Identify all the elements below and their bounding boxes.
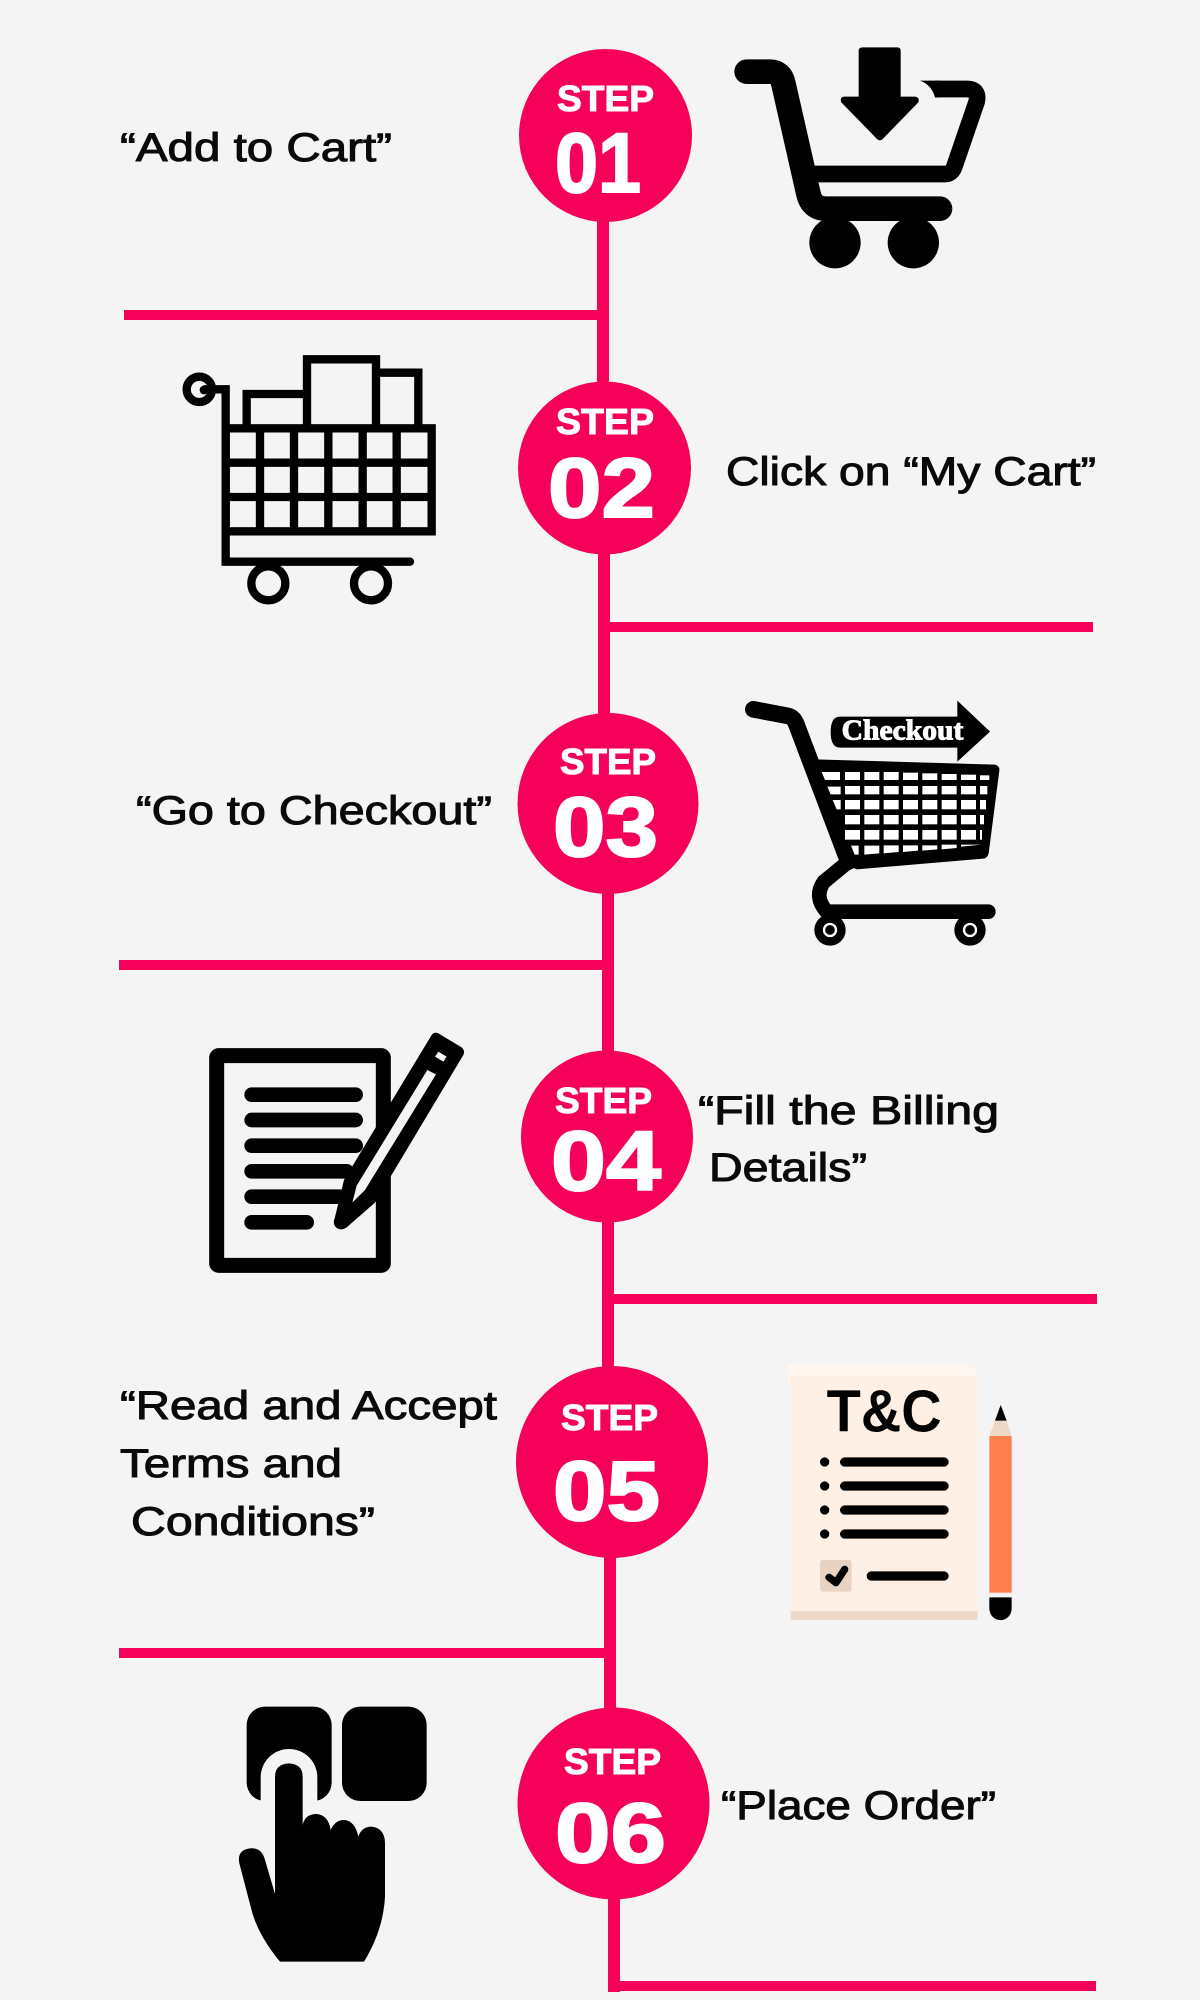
badge: step 03: 03 [553,780,658,874]
icon: checkout cart [753,701,999,946]
label: read and accept terms and conditions: Terms and [120,1442,342,1486]
label: fill the billing details: Details” [709,1146,867,1190]
badge: step 06: STEP [564,1741,661,1782]
icon: document with pencil [217,1033,464,1265]
label: go to checkout: “Go to Checkout” [136,789,492,833]
badge: step 02 [518,382,691,554]
icon: finger pressing button [239,1707,427,1962]
icon: checkout cart: Checkout [842,716,964,747]
badge: step 05: 05 [553,1444,660,1538]
label: add to cart: “Add to Cart” [120,126,392,170]
badge: step 01: STEP [557,78,654,119]
step 5 [120,1365,1012,1620]
step 3 [136,701,999,946]
badge: step 05 [516,1366,708,1558]
badge: step 04: 04 [551,1114,661,1208]
step 2 [187,359,1096,600]
icon: terms and conditions sheet with pencil: T&C [827,1378,942,1445]
label: read and accept terms and conditions: “Read and Accept [120,1384,497,1428]
badge: step 04 [521,1050,693,1222]
badge: step 03 [518,713,698,894]
badge: step 05: STEP [561,1397,658,1438]
icon: cart with download arrow [747,47,977,268]
icon: full shopping cart [187,359,432,600]
step 4 [217,1033,999,1265]
step 6 [239,1707,996,1962]
badge: step 04: STEP [555,1080,652,1121]
badge: step 06: 06 [555,1786,666,1880]
timeline connectors [119,215,1097,1992]
badge: step 01 [519,49,692,222]
step 1 [120,47,977,268]
badge: step 03: STEP [560,741,656,782]
label: read and accept terms and conditions [120,1384,497,1544]
label: fill the billing details [698,1089,999,1190]
icon: terms and conditions sheet with pencil [788,1365,1012,1620]
label: fill the billing details: “Fill the Billing [698,1089,999,1133]
badge: step 01: 01 [555,116,641,210]
badge: step 02: 02 [548,441,655,535]
badge: step 06 [518,1708,710,1900]
badge: step 02: STEP [556,401,654,442]
label: place order: “Place Order” [721,1784,996,1828]
label: click on my cart: Click on “My Cart” [726,450,1096,494]
label: read and accept terms and conditions: Conditions” [131,1500,375,1544]
